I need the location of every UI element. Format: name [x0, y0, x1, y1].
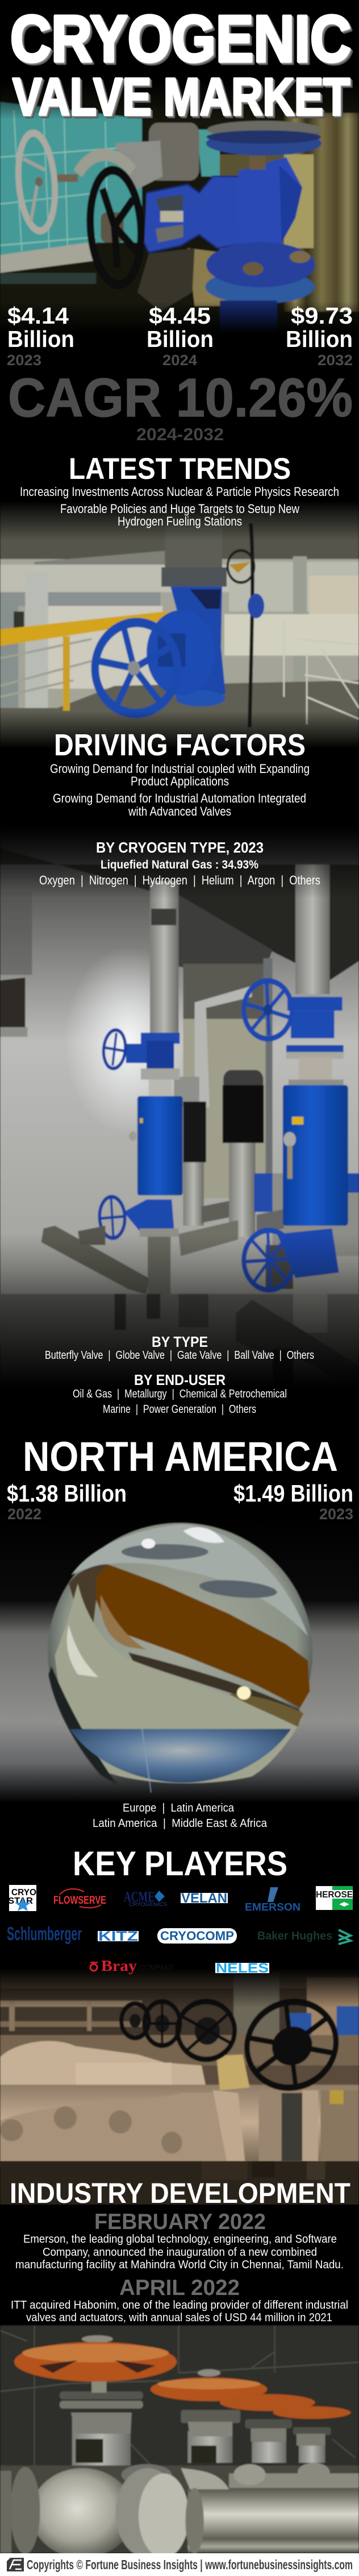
heading: north america — [7, 1434, 353, 1523]
development: April 2022: APRIL 2022 — [119, 2276, 240, 2300]
logo: Cryostar: STAR — [8, 1896, 33, 1906]
value 2032: Billion — [286, 326, 353, 352]
segment: by type — [45, 1333, 314, 1362]
heading: latest trends — [20, 452, 339, 528]
heading: driving factors — [50, 728, 310, 818]
factor items: Growing Demand for Industrial Automation Integrated — [53, 791, 306, 805]
development: February 2022 — [15, 2210, 344, 2271]
trend items: Hydrogen Fueling Stations — [118, 514, 242, 528]
value 2023: Billion — [7, 326, 74, 352]
development: February 2022: FEBRUARY 2022 — [94, 2210, 266, 2234]
logo: Neles: NELES — [216, 1961, 269, 1976]
regional value 2023 — [233, 1480, 353, 1523]
development: February 2022: manufacturing facility at Mahindra World City in Chennai, Tamil Nadu. — [15, 2259, 344, 2271]
logo: Bray: COMPANY — [140, 1963, 174, 1973]
value 2023: $4.14 — [7, 303, 69, 329]
regional value 2022: $1.38 Billion — [7, 1480, 127, 1507]
development: February 2022: Emerson, the leading global technology, engineering, and Software — [23, 2233, 337, 2246]
trend items: Favorable Policies and Huge Targets to Setup New — [60, 502, 299, 516]
logo: Bray — [90, 1957, 174, 1974]
market values — [7, 303, 353, 369]
logo: Cryostar: CRYO — [11, 1888, 36, 1897]
top of development photo — [0, 2161, 359, 2205]
value 2023: 2023 — [7, 352, 41, 369]
heading: key players: KEY PLAYERS — [73, 1845, 287, 1883]
regional value 2022 — [7, 1480, 127, 1523]
title — [10, 2, 351, 126]
value 2024: Billion — [147, 326, 214, 352]
end-user list: Marine | Power Generation | Others — [103, 1403, 256, 1416]
value 2032 — [286, 303, 353, 369]
regional value 2022: 2022 — [7, 1506, 41, 1523]
other regions: Latin America | Middle East & Africa — [93, 1817, 268, 1830]
end-user list: Oil & Gas | Metallurgy | Chemical & Petrochemical — [73, 1388, 287, 1400]
value 2024: 2024 — [162, 352, 198, 369]
segment: by cryogen type — [39, 839, 320, 887]
trend items — [20, 485, 339, 528]
development: April 2022: ITT acquired Habonim, one of the leading provider of different industrial — [11, 2299, 348, 2312]
CAGR: CAGR 10.26% — [8, 367, 353, 428]
development: February 2022: Company, announced the inauguration of a new combined — [43, 2246, 317, 2259]
segment: by cryogen type: BY CRYOGEN TYPE, 2023 — [96, 839, 264, 856]
factor items: Growing Demand for Industrial coupled with Expanding — [50, 762, 310, 776]
heading: latest trends: LATEST TRENDS — [69, 452, 291, 486]
lower pipework in faded floor — [0, 1293, 359, 1376]
CAGR: 2024-2032 — [136, 424, 224, 444]
logo: Herose — [316, 1886, 353, 1910]
heading: driving factors: DRIVING FACTORS — [54, 728, 306, 762]
value 2032: 2032 — [318, 352, 353, 369]
logo: Emerson: EMERSON — [245, 1901, 300, 1913]
logo: Herose: HEROSE — [316, 1890, 353, 1900]
footer — [0, 2553, 359, 2576]
value 2023 — [7, 303, 74, 369]
photo: black handwheels on beige pipes — [0, 1966, 359, 2168]
photo: pump room with blue valves — [0, 823, 359, 1396]
value 2032: $9.73 — [291, 303, 353, 329]
logo: Flowserve — [53, 1889, 106, 1908]
factor items — [50, 762, 310, 818]
value 2024 — [147, 303, 214, 369]
logo: Schlumberger: Schlumberger — [7, 1923, 82, 1944]
photo: valves against teal tile wall — [0, 80, 359, 336]
logo: Emerson — [245, 1887, 300, 1913]
development: April 2022: valves and actuators, with annual sales of USD 44 million in 2021 — [26, 2312, 332, 2324]
logo: Kitz: KITZ — [98, 1929, 138, 1944]
logo: Acme Cryogenics: CRYOGENICS — [129, 1901, 167, 1907]
photo: blue valve in industrial hall — [0, 498, 359, 752]
other regions — [93, 1802, 268, 1830]
development: April 2022 — [11, 2276, 348, 2324]
photo: glass marble — [0, 1513, 359, 1803]
factor items: with Advanced Valves — [128, 804, 231, 818]
logo: Velan: VELAN — [181, 1891, 227, 1906]
logo: Cryostar — [8, 1884, 37, 1912]
factor items: Product Applications — [131, 774, 229, 788]
logo: Acme Cryogenics: ACME — [124, 1889, 155, 1905]
logo: Flowserve: FLOWSERVE — [53, 1895, 106, 1907]
logo: Baker Hughes: Baker Hughes — [257, 1930, 332, 1942]
other regions: Europe | Latin America — [123, 1802, 235, 1814]
logo: Bray: Bray — [101, 1957, 137, 1974]
segment: by type: BY TYPE — [152, 1333, 208, 1350]
segment: by end-user: BY END-USER — [134, 1371, 226, 1388]
value 2024: $4.45 — [149, 303, 211, 329]
icon: Fortune Business Insights mark — [7, 2558, 24, 2571]
regional value 2023: 2023 — [319, 1506, 353, 1523]
end-user list — [73, 1388, 287, 1416]
segment: by end-user — [73, 1371, 287, 1416]
logo: Cryocomp: CRYOCOMP — [160, 1929, 234, 1943]
photo: orange handwheels on steel pipeline — [0, 2325, 359, 2558]
share of LNG: Liquefied Natural Gas : 34.93% — [101, 858, 258, 871]
